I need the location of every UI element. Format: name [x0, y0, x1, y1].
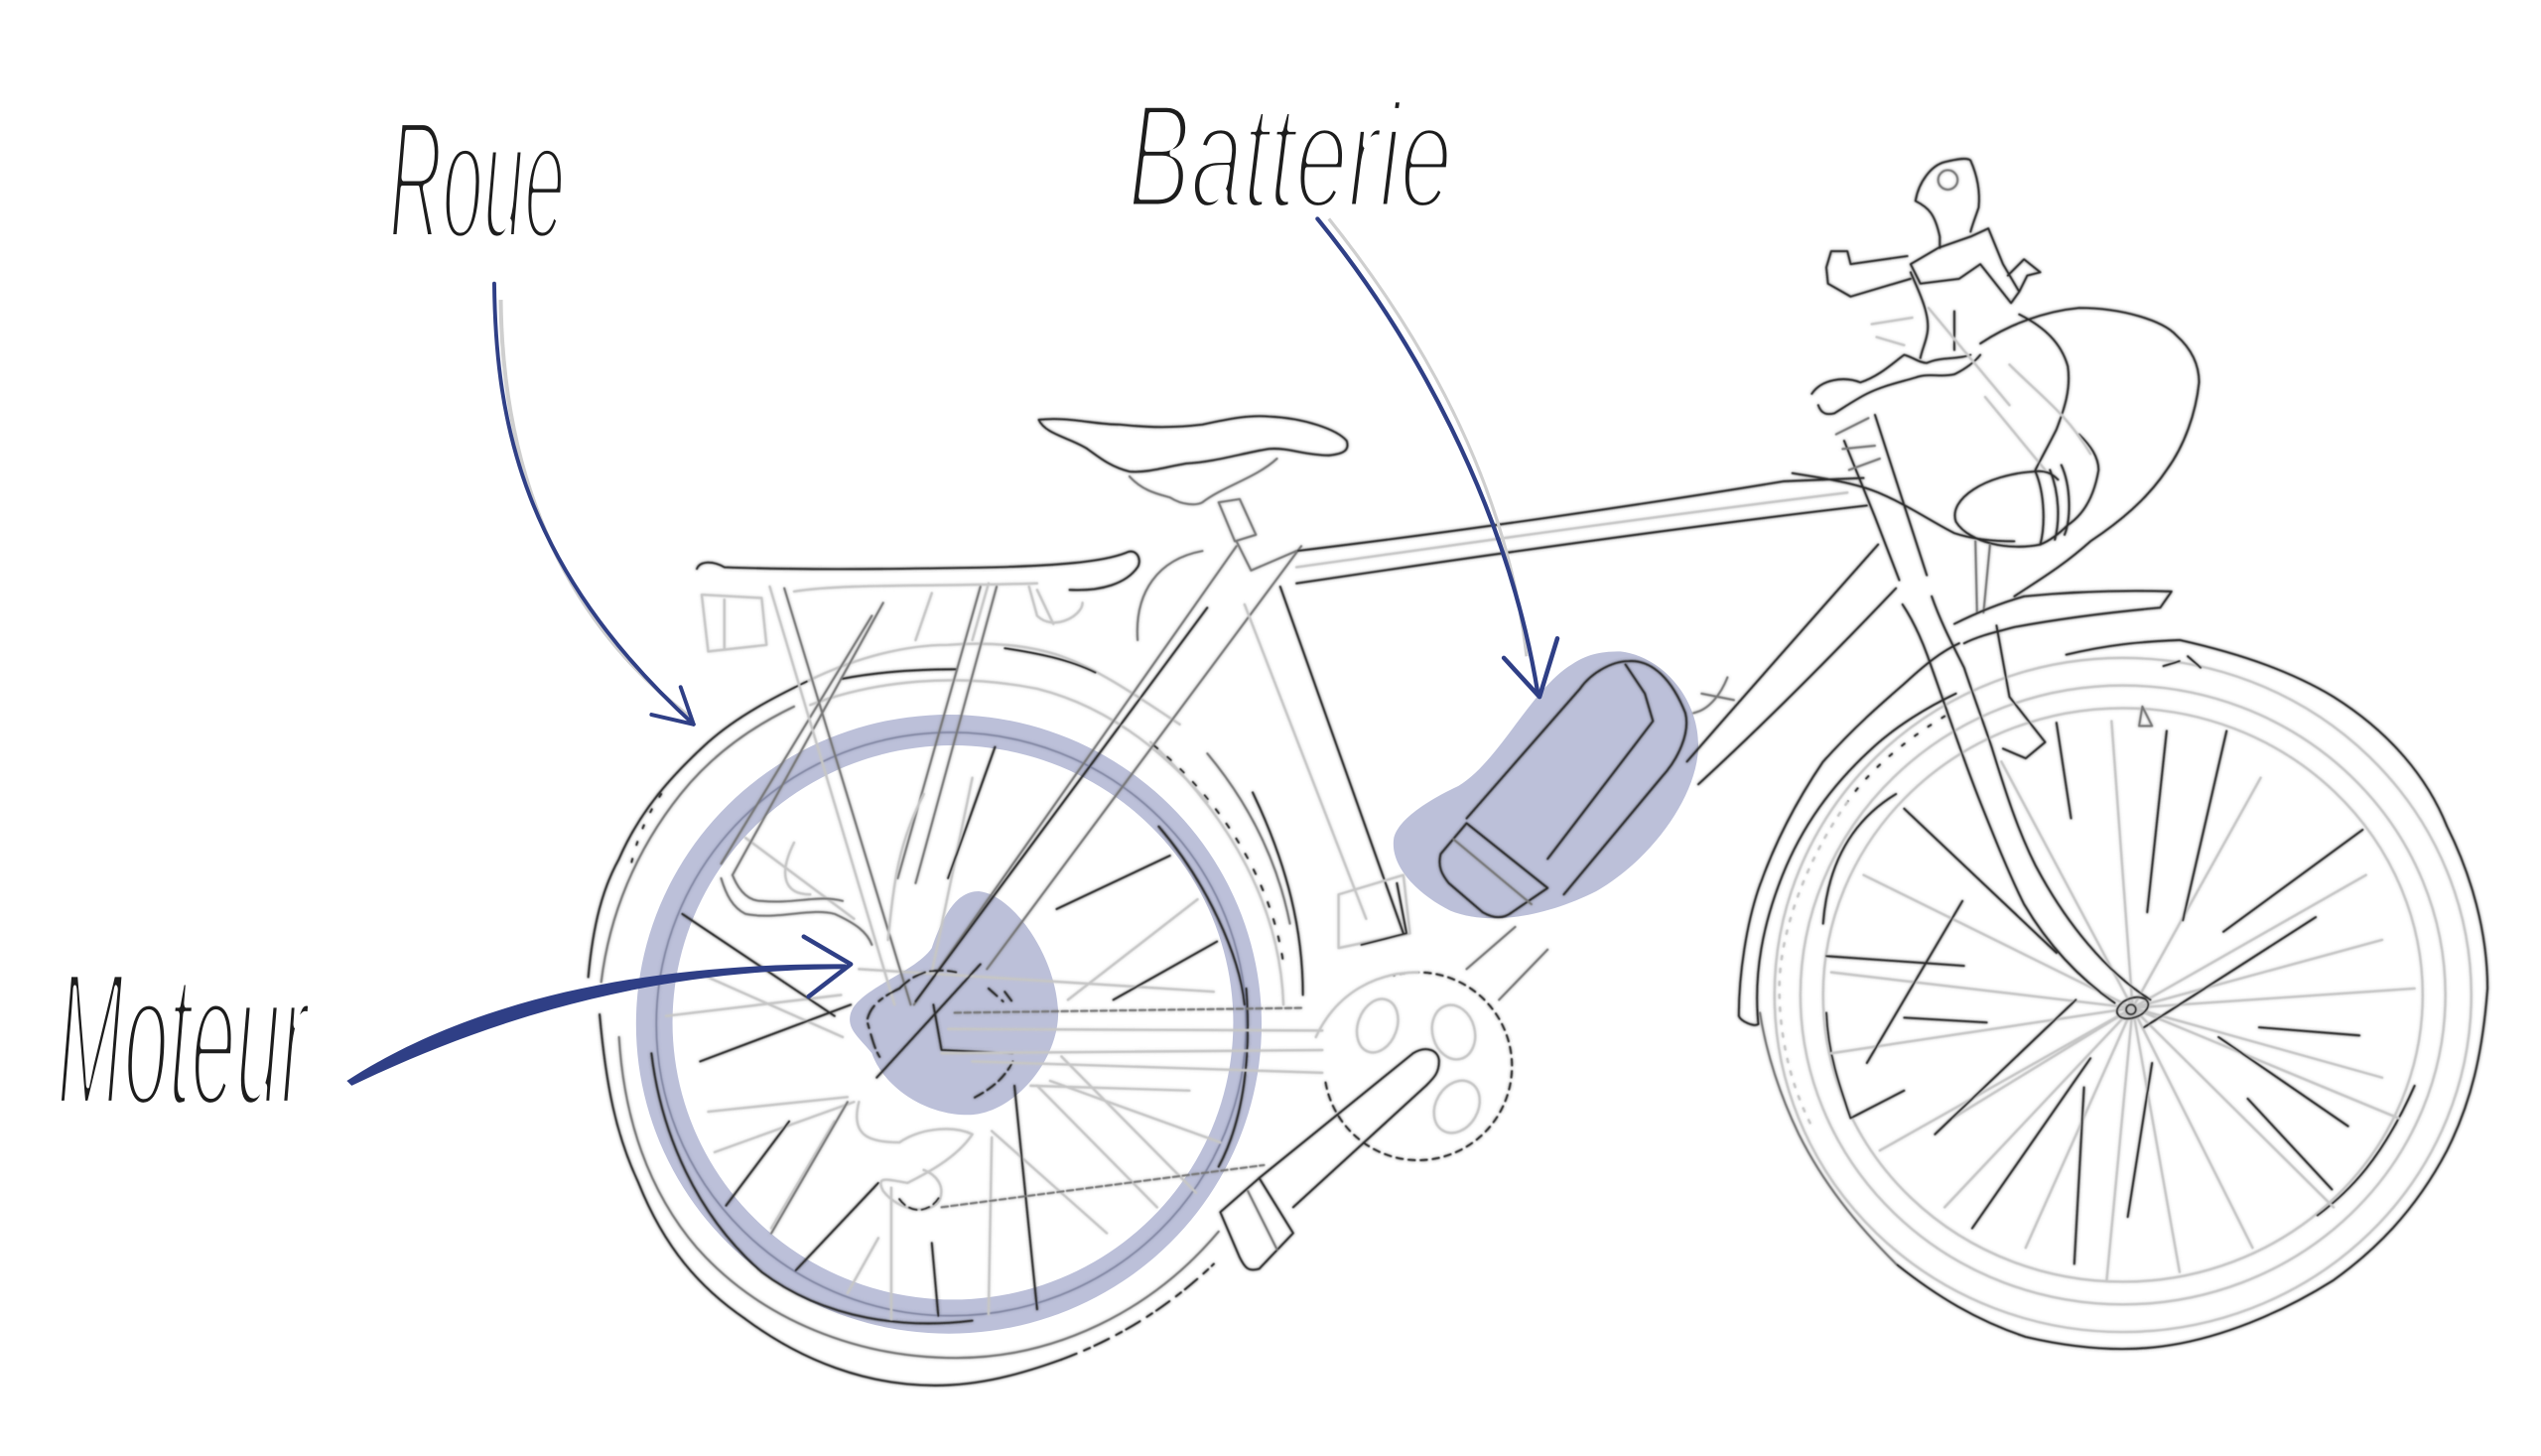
luggage rack: [697, 552, 1139, 1004]
large cable loop: [1980, 308, 2200, 596]
valve: [2139, 707, 2152, 726]
rear rim lines: [651, 732, 1248, 1323]
label: Moteur: Moteur: [57, 930, 311, 1146]
front tire: [1760, 640, 2487, 1349]
derailleur: [857, 1102, 973, 1210]
saddle and seat post: [1039, 416, 1348, 571]
highlight: motor: [850, 891, 1058, 1115]
frame: [914, 478, 1896, 1004]
chainring: [1326, 973, 1512, 1160]
arrow: Roue to wheel: [494, 284, 694, 725]
lamp: [1954, 471, 2058, 547]
highlight: wheel rim: [636, 715, 1262, 1334]
front light spokes: [1831, 722, 2415, 1280]
front rim: [1801, 686, 2446, 1304]
drivetrain: [857, 973, 1512, 1269]
rack box and light details: [702, 584, 1083, 651]
handlebar neck: [1911, 272, 1954, 358]
rear wheel: [589, 644, 1303, 1386]
chain: [955, 1008, 1303, 1012]
head tube and stem: [1844, 415, 1927, 581]
front wheel: [1739, 591, 2487, 1349]
top tube: [1296, 478, 1864, 551]
rack stays: [722, 587, 997, 1004]
curved rack support: [1137, 551, 1202, 640]
arrow: Moteur to motor: [346, 937, 851, 1086]
seat tube: [1280, 587, 1404, 933]
front fork: [1903, 596, 2151, 1022]
rear tire: [600, 742, 1303, 1386]
pedal: [1220, 1178, 1293, 1269]
handlebar and head tube: [1811, 159, 2045, 581]
label: Batterie: Batterie: [1128, 72, 1452, 239]
rack top rail: [697, 552, 1139, 591]
bicycle line drawing: [589, 159, 2487, 1386]
rear dark spokes: [682, 747, 1217, 1316]
bottle boss: [1693, 677, 1734, 713]
stem body and right lever: [1911, 228, 2041, 303]
battery drawing: [1439, 661, 1686, 917]
label: Roue: Roue: [389, 83, 565, 274]
rear light spokes: [666, 778, 1220, 1319]
chain stays: [942, 1029, 1322, 1073]
bell: [1916, 159, 1979, 248]
rear fender: [589, 644, 1207, 982]
seat stays: [914, 546, 1301, 1004]
crank arm: [1260, 1049, 1439, 1207]
saddle: [1039, 416, 1348, 471]
light handlebar sketch: [1872, 308, 2045, 470]
seat post: [1219, 499, 1296, 571]
handlebar: [1811, 355, 1980, 414]
down tube: [1687, 545, 1896, 784]
highlight: battery: [1394, 651, 1698, 918]
arrow: Batterie to battery: [1317, 218, 1557, 697]
seat tube clamp at bottom bracket: [1339, 875, 1409, 948]
motor hub sketch: [867, 964, 1014, 1099]
brake lever left: [1826, 251, 1911, 297]
front fender: [1739, 591, 2172, 1025]
front lamp and cable: [1793, 308, 2200, 612]
front dark spokes: [1826, 723, 2362, 1264]
